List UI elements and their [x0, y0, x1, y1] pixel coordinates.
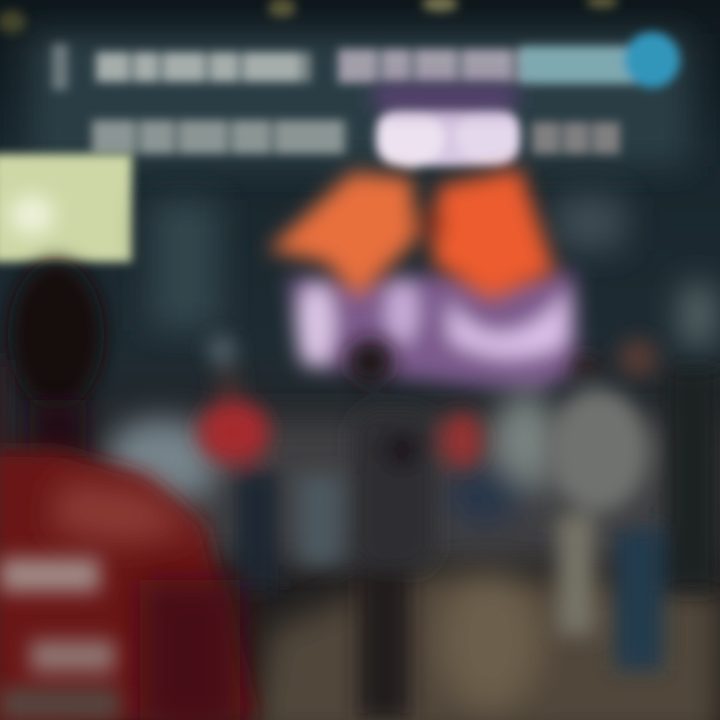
floor: [250, 570, 720, 720]
shirt print: [0, 558, 120, 720]
dark sleeve: [140, 580, 240, 720]
crowd mid background: [105, 390, 720, 560]
right person grey: [548, 338, 663, 670]
heading line 1: [52, 32, 680, 90]
left dim edge: [0, 360, 6, 450]
purple glow behind heading: [374, 86, 516, 108]
far right person: [665, 370, 720, 590]
banner wall panel: [30, 34, 690, 166]
person in red, centre left: [198, 366, 278, 590]
foreground person: [0, 260, 255, 720]
orange logo shape: [268, 168, 555, 300]
crowd figures: [198, 336, 720, 720]
lavender lower logo shape: [288, 272, 580, 392]
shirt highlight: [50, 480, 195, 545]
small pale head: [208, 336, 236, 364]
red shirt: [0, 450, 255, 720]
top ceiling lights: [0, 0, 618, 34]
side wall panels: [150, 195, 716, 345]
centre person: [298, 410, 436, 720]
small red person: [442, 412, 482, 468]
head: [8, 260, 104, 410]
small head right: [572, 354, 600, 382]
neck: [30, 400, 86, 456]
centre dark head: [347, 339, 393, 385]
left green screen: [0, 154, 132, 262]
screen highlight: [10, 195, 54, 235]
heading line 2: [92, 108, 622, 168]
